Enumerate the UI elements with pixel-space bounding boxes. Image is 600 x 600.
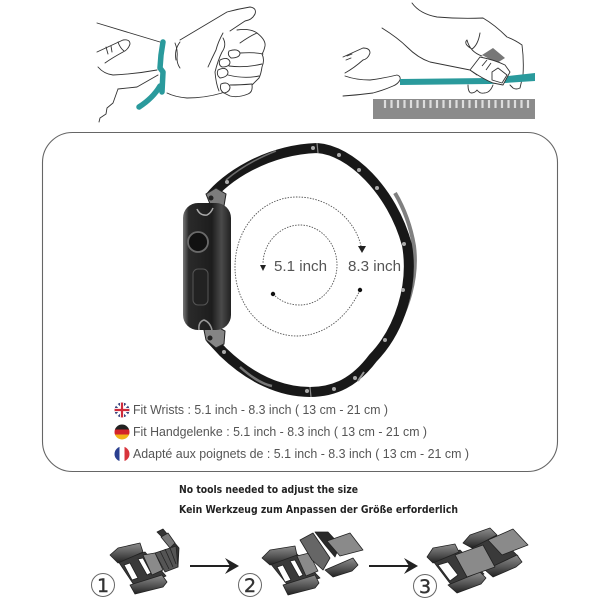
flag: UK bbox=[114, 402, 130, 418]
teal strip around wrist bbox=[139, 42, 163, 107]
illustration: measuring wrist with strip bbox=[97, 7, 265, 122]
clasp step 3 bbox=[427, 528, 528, 593]
dark wedge on hand bbox=[482, 48, 505, 63]
clasp step 1 bbox=[110, 529, 179, 594]
clasp step 2 bbox=[262, 532, 363, 595]
thumb over strip bbox=[470, 57, 510, 85]
ruler bbox=[373, 99, 535, 119]
dotted arc: 5.1 inch bbox=[260, 225, 337, 305]
text: fit handgelenke: Fit Handgelenke : 5.1 inch - 8.3 inch ( 13 cm - 21 cm ) bbox=[133, 425, 427, 439]
illustration: reading strip on ruler bbox=[343, 3, 523, 96]
step number 2 bbox=[238, 574, 262, 597]
watch lugs bbox=[204, 188, 226, 348]
step number 2: 2 bbox=[244, 575, 256, 597]
watch case bbox=[183, 203, 231, 330]
step number 1 bbox=[92, 574, 114, 597]
panel: size range frame bbox=[42, 132, 558, 472]
step number 3: 3 bbox=[419, 576, 431, 598]
teal strip on ruler bbox=[400, 73, 535, 85]
flag: France bbox=[114, 446, 130, 461]
arrow 2 bbox=[369, 558, 418, 574]
label: 5.1 inch: 5.1 inch bbox=[274, 258, 327, 275]
heading: kein werkzeug: Kein Werkzeug zum Anpassen der Größe erforderlich bbox=[179, 504, 458, 516]
label: 8.3 inch: 8.3 inch bbox=[348, 258, 401, 275]
heading: no tools needed: No tools needed to adjust the size bbox=[179, 484, 358, 496]
flag: Germany bbox=[114, 424, 130, 440]
step number 3 bbox=[414, 574, 436, 598]
metal link watch band bbox=[210, 143, 415, 397]
text: fit wrists: Fit Wrists : 5.1 inch - 8.3 inch ( 13 cm - 21 cm ) bbox=[133, 403, 388, 417]
dotted arc: 8.3 inch bbox=[235, 197, 366, 336]
step number 1: 1 bbox=[97, 575, 109, 597]
arrow 1 bbox=[190, 558, 239, 574]
text: adapte aux poignets: Adapté aux poignets de : 5.1 inch - 8.3 inch ( 13 cm - 21 cm ) bbox=[133, 447, 469, 461]
